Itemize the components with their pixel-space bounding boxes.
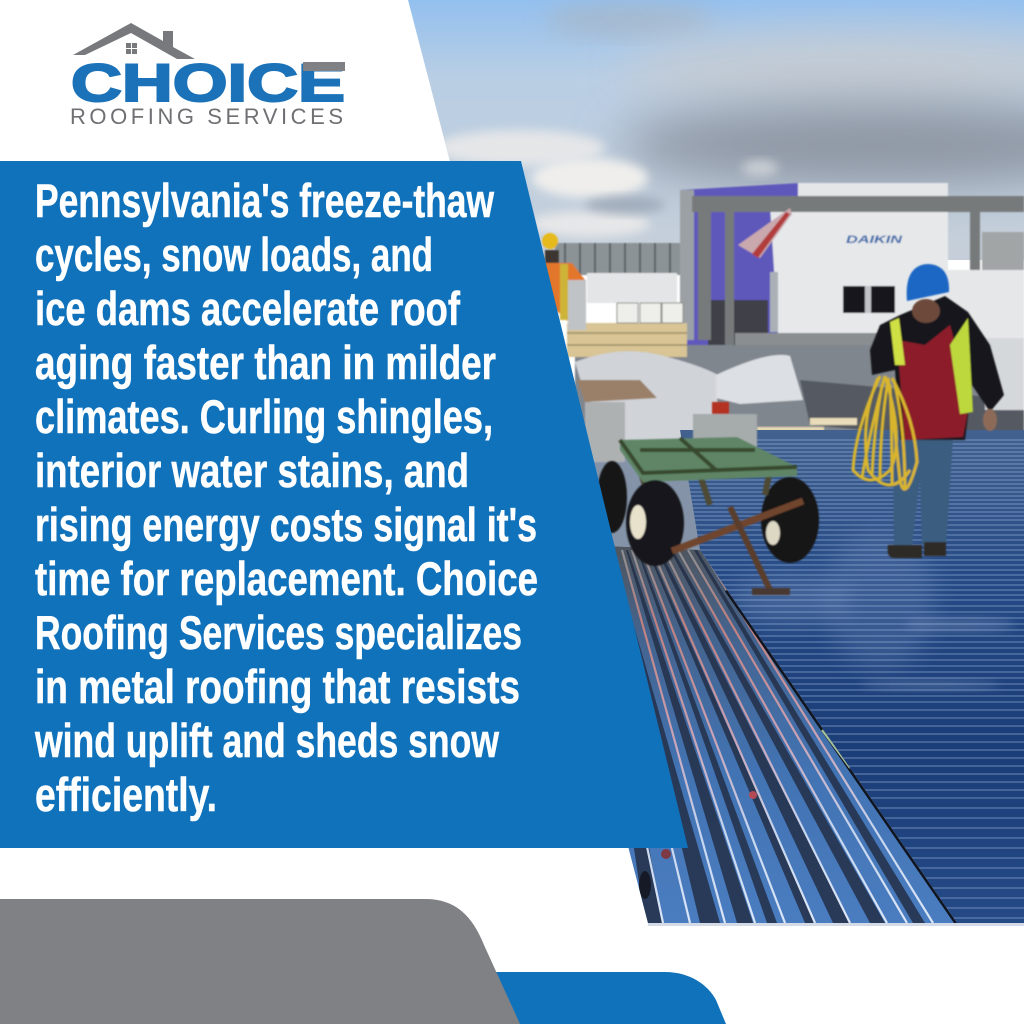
body text: Pennsylvania's freeze-thaw — [35, 174, 494, 227]
body text: rising energy costs signal it's — [35, 498, 537, 551]
front wheel — [626, 480, 684, 566]
photo bottom edge line — [648, 923, 1024, 926]
rooftop scene — [542, 183, 1024, 555]
blue ribbed roof deck — [670, 425, 1024, 925]
handle and stand — [672, 501, 803, 551]
background worker — [542, 233, 586, 330]
body text: time for replacement. Choice — [35, 552, 538, 605]
body text: in metal roofing that resists — [35, 660, 520, 713]
logo wordmark: CHOICE — [71, 54, 345, 113]
pallet and boxes — [587, 273, 677, 303]
face — [912, 299, 940, 323]
logo tagline: ROOFING SERVICES — [70, 104, 343, 129]
steel frame — [692, 196, 1024, 355]
plastic sheeting — [575, 351, 718, 443]
distant fence — [555, 243, 680, 275]
body text: interior water stains, and — [35, 444, 469, 497]
body text: aging faster than in milder — [35, 336, 496, 389]
footer grey tab — [0, 899, 520, 1024]
panel: blue text block — [0, 161, 688, 848]
green deck — [620, 437, 797, 482]
cart — [597, 402, 819, 595]
white insulation stacks — [948, 270, 1024, 338]
yellow rope coil — [853, 376, 917, 490]
body text: cycles, snow loads, and — [35, 228, 433, 281]
body text: climates. Curling shingles, — [35, 390, 493, 443]
logo roof icon — [73, 23, 195, 59]
body text: Roofing Services specializes — [35, 606, 522, 659]
body text: ice dams accelerate roof — [35, 282, 460, 335]
hand — [983, 409, 997, 431]
sky with clouds — [400, 0, 1024, 260]
foreground worker — [853, 264, 1004, 558]
hard hat — [907, 264, 949, 301]
jeans — [893, 438, 953, 545]
body text: efficiently. — [35, 768, 217, 821]
rooftop machine — [982, 232, 1024, 270]
logo grey E bar — [303, 62, 345, 71]
rear left wheel — [597, 461, 627, 533]
rear right wheel — [761, 477, 819, 563]
ground under the cart — [594, 456, 704, 555]
cream boards — [756, 426, 825, 430]
white chiller unit — [770, 205, 948, 333]
body text: wind uplift and sheds snow — [34, 714, 499, 767]
metal box and beacon — [693, 414, 757, 447]
cart legs — [638, 476, 772, 506]
hi-vis vest — [890, 318, 905, 365]
corrugated metal panel — [614, 546, 957, 923]
ground — [574, 344, 980, 430]
purple equipment — [680, 183, 800, 345]
brown board — [577, 380, 657, 402]
red jacket panel — [897, 325, 970, 440]
logo — [70, 23, 345, 129]
body text — [34, 174, 538, 821]
photo: workers on metal roof — [400, 0, 1024, 925]
boots — [888, 542, 946, 558]
dark valleys — [626, 550, 925, 923]
flag — [738, 208, 792, 258]
black jacket — [870, 296, 1004, 440]
Daikin label: DAIKIN — [846, 234, 904, 246]
footer blue tab — [490, 972, 726, 1024]
